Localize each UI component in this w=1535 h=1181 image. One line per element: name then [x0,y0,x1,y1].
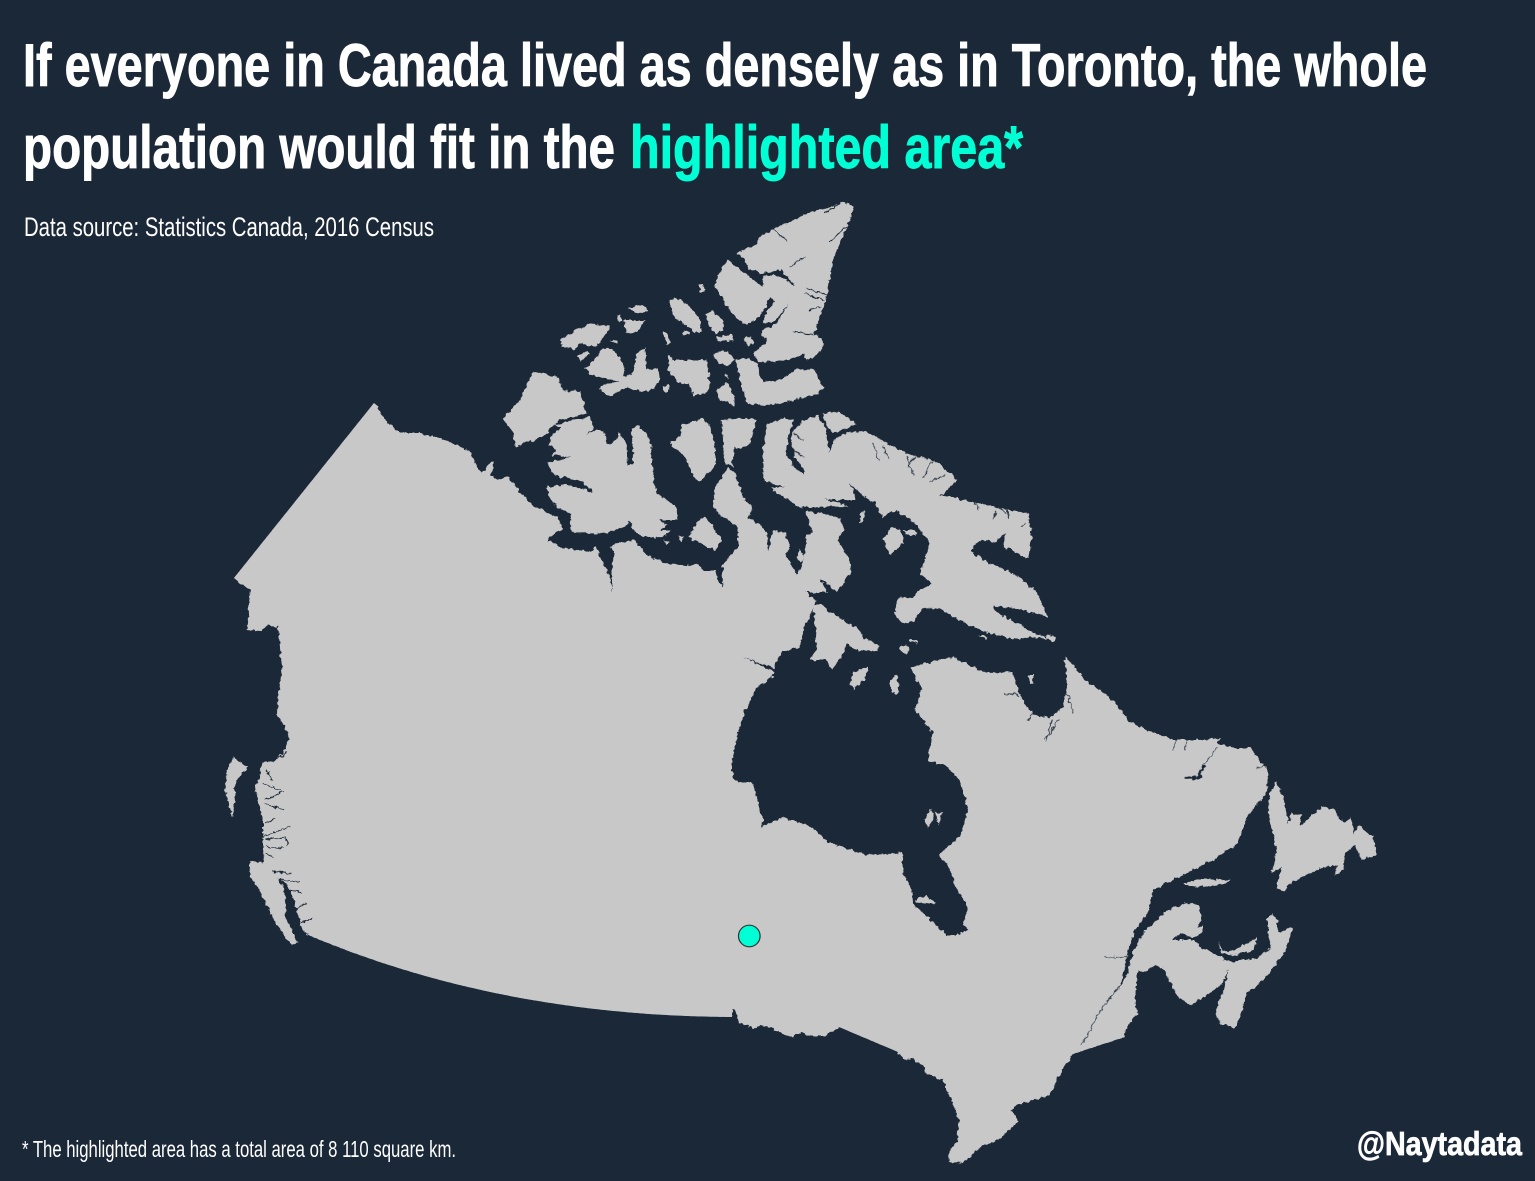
Salisbury Island [910,640,918,643]
Newfoundland [1268,782,1377,892]
Foxe Basin small island [859,510,865,524]
Melville Island [585,348,660,397]
Brock Island [628,305,648,313]
highlighted area marker [738,925,760,947]
Air Force Island [903,530,917,535]
Southampton Island [810,603,880,670]
Mackenzie King Island [623,320,645,333]
small island D [663,332,671,345]
Prince of Wales Island [670,418,715,482]
Axel Heiberg Island [715,260,772,325]
small island C [610,340,617,344]
Hudson Strait islet [978,635,988,641]
Belcher Islands [915,808,942,903]
King William Island [688,517,722,550]
Somerset Island [722,418,757,467]
title highlight: highlighted area* [630,114,1024,181]
Cornwall Island [717,335,733,342]
small island A [617,315,623,322]
Ellesmere fjords [773,203,848,335]
Nottingham Island [900,645,910,654]
Bylot Island [822,412,857,433]
Resolution Island [1047,635,1055,642]
Akimiski Island [915,895,935,903]
Baffin and Ungava fjords [793,433,1073,740]
Vancouver Island [250,860,298,945]
North Kent Island [713,350,735,367]
Labrador and St Lawrence [1043,720,1265,1053]
Haida Gwaii [225,757,247,817]
data source: Data source: Statistics Canada, 2016 Census [24,212,434,242]
Ellesmere Island [737,203,854,362]
straight land borders [232,401,1126,1057]
Bathurst Island [668,357,710,396]
small island G [725,373,728,379]
Ellef Ringnes Island [706,312,723,333]
Arctic Archipelago [503,203,854,447]
small gulf islands [663,540,669,545]
Prince Charles Island [883,528,903,555]
small island E [683,330,690,334]
title line 2: population would fit in the [23,114,615,181]
Amund Ringnes Island [670,298,702,333]
Victoria Island [547,417,677,538]
mainland [234,403,1293,1163]
Atlantic islands [1183,782,1377,955]
Committee Bay island [797,548,804,563]
Devon Island [736,358,823,406]
fjords: dark inlets [263,203,1265,1053]
Baffin Island [763,416,1055,641]
Graham Island [744,337,753,346]
footnote: * The highlighted area has a total area of 8 110 square km. [22,1136,456,1162]
small island F [663,385,669,393]
Anticosti Island [1183,879,1230,887]
small island B [577,351,590,362]
map: Canada [225,203,1377,1163]
Cornwallis Island [717,383,735,405]
Pacific coast fjords [263,752,312,923]
Coats Island [850,667,868,690]
Queen Maud Gulf island [678,537,683,543]
Mansel Island [890,675,899,695]
Meighen Island [698,283,705,292]
Akpatok Island [1028,675,1033,683]
Banks Island [503,372,587,447]
Prince Edward Island [1218,938,1257,955]
Hudson Bay and Foxe Basin islands [663,412,1055,695]
Borden Island [560,323,610,350]
